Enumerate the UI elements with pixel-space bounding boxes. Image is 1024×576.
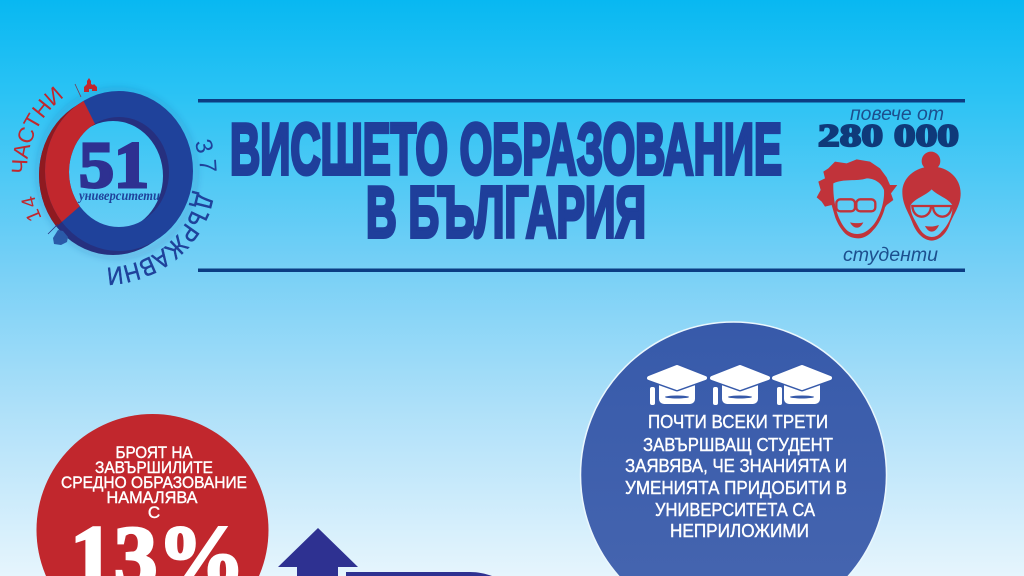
icon: male student <box>817 159 897 238</box>
header rule bottom <box>198 268 965 272</box>
curved label: 14: 14 <box>21 196 42 221</box>
ring shadow <box>38 89 196 257</box>
callout text: СРЕДНО ОБРАЗОВАНИЕ <box>61 473 247 492</box>
label: students: студенти <box>843 245 938 266</box>
arrow up <box>278 528 358 576</box>
callout text <box>625 411 847 541</box>
donut chart: 51 universities <box>38 89 196 257</box>
callout text: УМЕНИЯТА ПРИДОБИТИ В <box>625 477 847 498</box>
callout text: БРОЯТ НА <box>116 443 193 462</box>
students counter <box>817 104 961 266</box>
curved label: 37: 37 <box>196 140 217 171</box>
header rule top <box>198 99 965 102</box>
callout text: УНИВЕРСИТЕТА СА <box>655 499 816 520</box>
callout text: ПОЧТИ ВСЕКИ ТРЕТИ <box>648 411 828 432</box>
icon: private university building <box>75 78 97 97</box>
callout text: ЗАЯВЯВА, ЧЕ ЗНАНИЯТА И <box>625 455 847 476</box>
icon: three graduation caps <box>649 367 830 405</box>
callout text: С <box>148 503 160 522</box>
title <box>230 110 782 253</box>
callout text <box>61 443 247 522</box>
ring depth <box>39 95 187 255</box>
curved label: state: ДЪРЖАВНИ <box>108 190 214 286</box>
panel: red circle callout <box>36 414 268 576</box>
label: more than: повече от <box>850 104 944 125</box>
callout text: ЗАВЪРШВАЩ СТУДЕНТ <box>643 434 833 455</box>
ring blue segment: 37 state <box>45 91 193 251</box>
callout text: НАМАЛЯВА <box>106 488 198 507</box>
ring red segment: 14 private <box>45 100 95 222</box>
number: 280 000: 280 000 <box>818 117 959 153</box>
title: В БЪЛГАРИЯ <box>366 173 646 253</box>
callout text: НЕПРИЛОЖИМИ <box>670 520 809 541</box>
callout text: ЗАВЪРШИЛИТЕ <box>95 458 213 477</box>
icon: female student <box>902 152 961 241</box>
blue bar <box>346 572 492 576</box>
ring depth red <box>39 104 96 226</box>
panel: blue circle callout <box>580 322 886 576</box>
icon: state university building <box>48 224 68 245</box>
donut centre number: 51 <box>79 129 149 202</box>
curved label: private: ЧАСТНИ <box>12 86 63 172</box>
donut centre label: университети <box>77 189 160 204</box>
